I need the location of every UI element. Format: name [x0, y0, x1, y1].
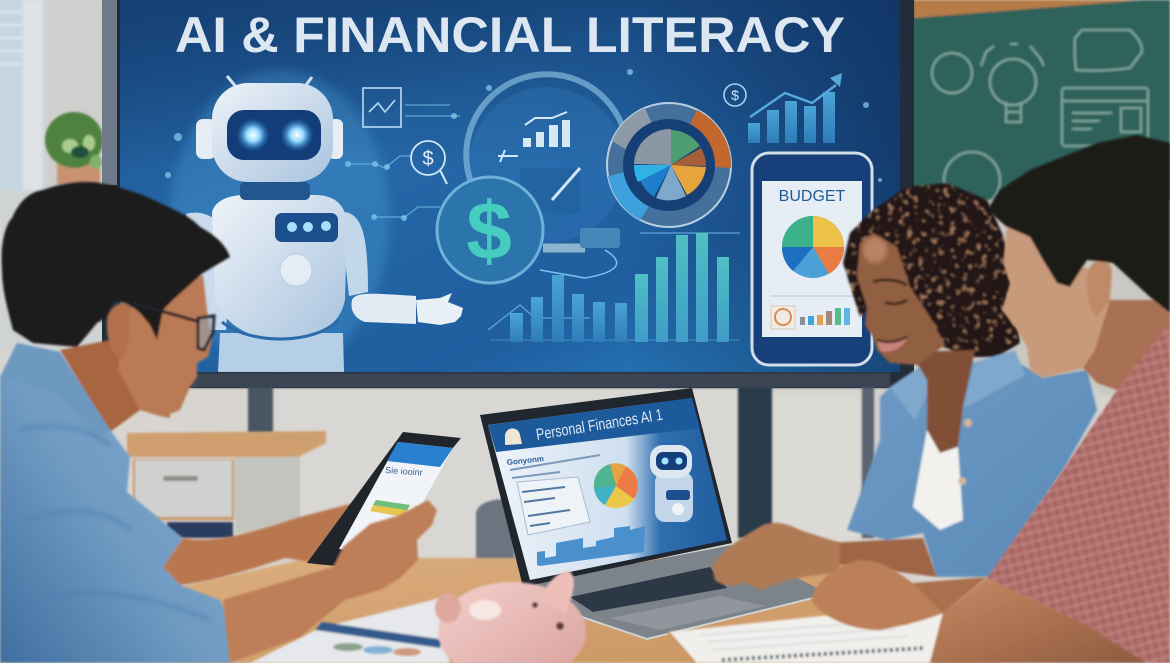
laptop pie chart — [594, 463, 638, 508]
man face — [118, 275, 212, 417]
plaid man shirt — [987, 323, 1170, 663]
man shirt collar — [0, 343, 110, 440]
laptop logo — [505, 428, 522, 445]
notebook — [668, 612, 945, 663]
man glasses — [133, 303, 214, 350]
icon: message tag — [540, 228, 620, 278]
potted plant — [45, 112, 103, 184]
robot left arm — [186, 213, 232, 330]
chest button — [280, 254, 312, 286]
display network lines — [348, 105, 740, 340]
laptop bar chart — [537, 526, 645, 566]
man shirt — [0, 343, 230, 663]
laptop front edge — [573, 598, 813, 639]
woman jacket buttons — [958, 419, 972, 485]
chair back — [476, 499, 515, 560]
icon: robot on display — [170, 70, 463, 372]
man neck — [60, 330, 170, 432]
laptop screen — [488, 398, 727, 580]
chart: top-right rising bars: $ — [731, 87, 739, 103]
heading: AI & FINANCIAL LITERACY — [175, 7, 845, 63]
table — [180, 558, 1000, 663]
display particles — [165, 69, 882, 221]
handheld phone — [307, 432, 461, 568]
chart: lower bars on display — [510, 233, 729, 342]
man hair — [2, 182, 230, 347]
window blinds — [0, 12, 22, 64]
woman forearm — [830, 538, 937, 577]
left papers — [250, 598, 450, 663]
chart: hologram dial with mini bars — [466, 74, 625, 243]
budget mini bars — [770, 296, 855, 329]
woman face — [857, 233, 945, 365]
laptop text card — [510, 455, 600, 535]
robot antennas — [227, 76, 312, 89]
icon: magnifier with dollar — [411, 141, 447, 184]
robot head — [212, 83, 333, 182]
woman hand — [712, 523, 840, 590]
woman features — [873, 280, 907, 342]
chalkboard — [912, 0, 1170, 208]
piggy bank — [435, 571, 586, 663]
plaid man neck — [1043, 300, 1170, 390]
man ear — [107, 303, 130, 360]
phone header — [387, 442, 453, 467]
robot visor — [227, 110, 321, 160]
laptop lid — [480, 388, 732, 587]
laptop title: Personal Finances AI 1 — [535, 407, 664, 444]
icon: dollar coin — [437, 177, 585, 283]
laptop trackpad — [610, 596, 765, 630]
woman collar — [890, 350, 1025, 420]
robot right arm — [345, 212, 368, 296]
chart: top-right rising bars — [724, 73, 842, 143]
robot lower body — [218, 333, 344, 372]
plaid man hand — [811, 560, 943, 630]
plaid man hair — [987, 135, 1170, 313]
display stand and furniture — [190, 373, 890, 538]
man front hand — [223, 500, 437, 663]
robot torso — [212, 195, 347, 340]
person: young man in plaid — [811, 135, 1170, 663]
robot forearm — [352, 294, 416, 324]
icon: dollar coin: $ — [466, 186, 512, 277]
woman forehead light — [863, 237, 887, 263]
chalk doodles — [932, 30, 1148, 208]
icon: magnifier with dollar: $ — [422, 148, 434, 170]
laptop subheading: Gonyonm — [506, 454, 544, 467]
laptop keyboard — [570, 567, 727, 612]
plaid man ear — [1087, 260, 1112, 317]
person: young man with glasses — [0, 182, 357, 663]
chest panel — [275, 213, 338, 242]
laptop — [480, 388, 817, 639]
icon: circuit box — [363, 88, 401, 127]
phone chart — [370, 500, 410, 517]
plaid man forearm — [880, 570, 987, 625]
phone text: Sie iooinr — [385, 465, 423, 478]
woman top — [913, 430, 963, 530]
robot ears — [196, 119, 216, 159]
person: young woman — [830, 183, 1097, 577]
man sleeve folds — [20, 426, 210, 620]
budget heading: BUDGET — [779, 188, 846, 205]
phone on display — [752, 153, 872, 365]
wall-mounted display — [102, 0, 914, 388]
woman jacket — [847, 358, 1097, 577]
plaid man arm — [930, 578, 1147, 663]
laptop base — [523, 545, 817, 639]
woman lips — [877, 338, 907, 352]
plaid man face — [1002, 227, 1110, 378]
budget pie — [782, 216, 844, 278]
woman curls — [843, 183, 1020, 357]
side desk — [127, 431, 326, 538]
robot hand — [416, 293, 463, 325]
robot eyes — [236, 118, 270, 152]
chart: donut and pie — [607, 103, 731, 227]
woman hair — [843, 183, 1020, 357]
laptop screen header — [488, 398, 700, 452]
robot neck — [240, 182, 310, 200]
woman neck — [910, 350, 975, 453]
robot waist band — [222, 320, 338, 339]
laptop robot — [650, 445, 693, 522]
man back arm — [163, 502, 357, 585]
